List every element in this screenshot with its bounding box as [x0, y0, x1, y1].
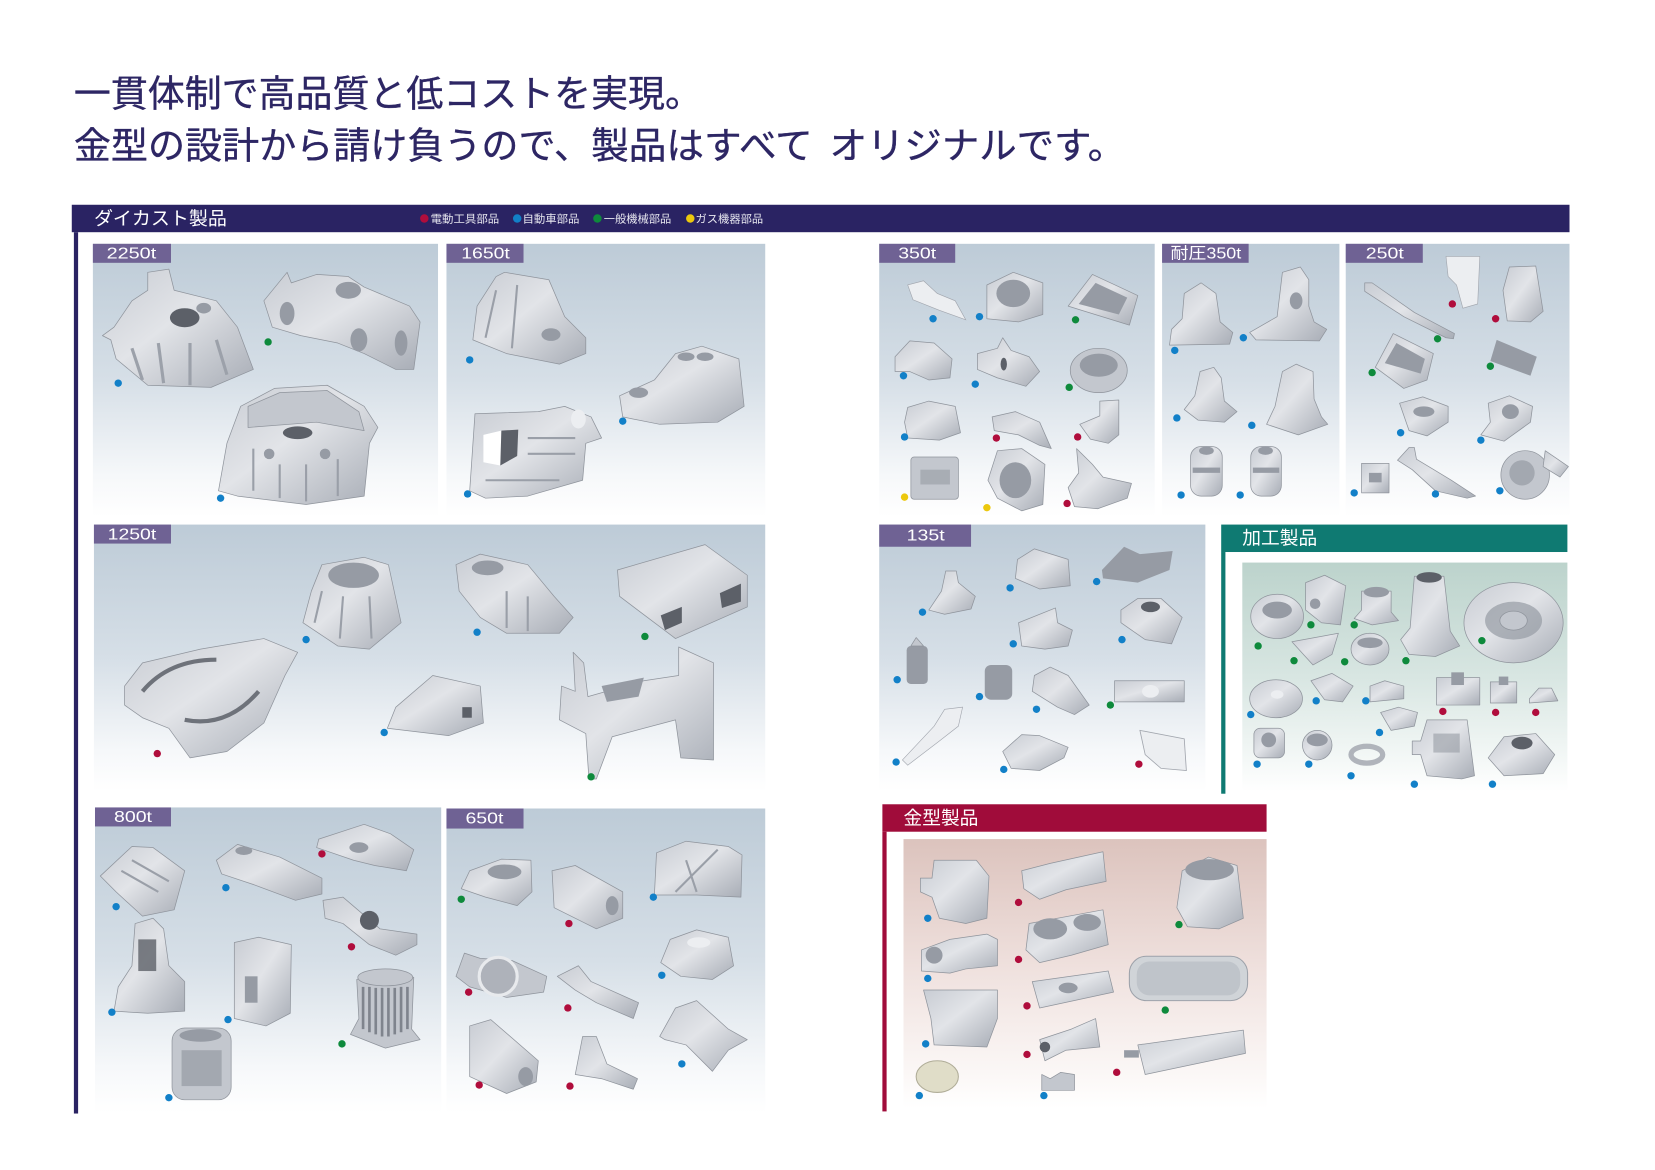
part: long block: [317, 824, 414, 871]
part: flanged housing: [1397, 397, 1448, 436]
part: handle shell: [1446, 256, 1480, 308]
part: square block: [1306, 575, 1346, 629]
part: heat sink: [1368, 334, 1433, 388]
part: tall cone: [1401, 572, 1460, 664]
part: impeller cover: [976, 272, 1043, 322]
title: オリジナルです。: [830, 125, 1125, 166]
part: small round base: [1253, 728, 1285, 768]
title: 一貫体制で高品質と低コストを実現。: [74, 74, 702, 115]
part: shallow dish: [1247, 680, 1302, 718]
part: small block: [1362, 681, 1404, 705]
tag: 2250t: [93, 244, 171, 263]
header: machined products: 加工製品: [1242, 528, 1317, 549]
part: rib box: [922, 990, 997, 1048]
panel: 250t: [1346, 244, 1570, 517]
part: flanged plate: [1376, 707, 1418, 736]
part: triangle plate: [1290, 633, 1338, 665]
part: pipe body: [921, 934, 997, 982]
section: die-cast products header and frame: ダイカスト製品: [94, 208, 227, 229]
part: cartridge: [893, 638, 928, 684]
part: flanged cylinder: [1350, 587, 1399, 629]
part: valve B: [1240, 267, 1327, 341]
panel: 350t: [879, 244, 1155, 517]
part: burner body: [983, 449, 1045, 511]
part: cover casting: [1000, 735, 1068, 773]
part: bracket arm: [1397, 448, 1476, 498]
header: machined products: [1221, 525, 1567, 794]
part: fitting A: [1177, 446, 1222, 499]
tag: 1650t: 1650t: [461, 246, 511, 263]
tag: 1650t: [446, 244, 524, 263]
panel: 2250t: [93, 244, 438, 517]
part: L-pipe: [1074, 400, 1119, 443]
panel: 1650t: [446, 244, 765, 517]
panel: machined products: [1221, 525, 1567, 794]
part: finned cylinder: [338, 969, 420, 1048]
part: motor body: [1411, 720, 1475, 788]
legend: ガス機器部品: [696, 213, 763, 226]
title: 製品はすべて: [591, 125, 813, 166]
part: grid plate: [1129, 956, 1248, 1014]
part: tall case: [224, 937, 291, 1026]
part: small base: [1490, 677, 1517, 716]
part: motor frame: [559, 647, 714, 781]
tag: pressure-tight 350t: 耐圧350t: [1171, 245, 1242, 263]
part: bell housing: [302, 557, 401, 649]
tag: 350t: [879, 244, 955, 263]
part: gasket ring: [1347, 746, 1383, 779]
tag: 250t: [1346, 244, 1423, 263]
tag: 350t: 350t: [898, 246, 937, 263]
part: valve A: [1169, 283, 1233, 354]
part: flanged housing: [1488, 734, 1555, 788]
part: angled arm: [892, 707, 963, 766]
part: gear case: [456, 554, 573, 636]
tag: 135t: [879, 525, 971, 547]
tag: 650t: [446, 808, 524, 829]
part: low boss: [1529, 688, 1558, 716]
part: twin cup block: [1015, 910, 1108, 963]
tag: 800t: [95, 807, 171, 826]
section: die-cast products header and frame: [72, 205, 1570, 1114]
part: valve D: [1248, 364, 1328, 435]
part: shroud: [458, 859, 532, 906]
panel: 650t: [446, 808, 765, 1114]
tag: 2250t: 2250t: [107, 246, 157, 263]
part: cover shell: [1492, 266, 1543, 322]
part: pale boss: [916, 1061, 958, 1099]
part: pocket plate: [1023, 971, 1114, 1010]
part: bell: [1477, 396, 1533, 444]
legend: 自動車部品: [522, 213, 579, 226]
header: die products: 金型製品: [903, 807, 978, 828]
part: arm with gear: [323, 897, 417, 955]
part: ring: [1341, 633, 1389, 665]
part: small housing: [1311, 673, 1353, 705]
part: ribbed cover: [650, 841, 742, 901]
part: large disc: [1464, 583, 1563, 663]
part: round housing: [1118, 598, 1182, 644]
title: [74, 74, 1125, 166]
part: plate: [1006, 549, 1070, 592]
part: spool: [976, 665, 1012, 700]
tag: 650t: 650t: [465, 810, 504, 827]
part: bell housing: [102, 269, 253, 387]
part: spoked wheel: [456, 953, 547, 997]
part: oval case: [216, 844, 322, 900]
part: small clip: [1040, 1072, 1074, 1099]
part: fan wheel: [1066, 348, 1127, 393]
legend: 電動工具部品: [431, 213, 499, 226]
part: open frame case: [464, 406, 602, 498]
part: cylinder sleeve: [1175, 857, 1243, 929]
title: 金型の設計から請け負うので、: [74, 125, 591, 166]
part: cylinder block: [901, 401, 960, 441]
part: small heat sink: [1487, 340, 1537, 376]
tag: 250t: 250t: [1366, 246, 1405, 263]
part: small block: [1350, 463, 1389, 497]
part: round cover plate: [125, 639, 298, 758]
part: double tube: [1010, 608, 1072, 649]
part: cup: [1302, 730, 1332, 768]
tag: pressure-tight 350t: [1162, 244, 1249, 263]
part: cylinder case: [165, 1028, 231, 1101]
panel: die products: [882, 804, 1267, 1111]
part: housing: [972, 338, 1040, 388]
part: valve C: [1173, 367, 1237, 422]
part: cone fitting: [1023, 1019, 1100, 1061]
tag: 800t: 800t: [114, 809, 153, 826]
tag: 1250t: [94, 525, 171, 544]
part: stem arm: [566, 1036, 638, 1090]
part: nozzle: [1015, 852, 1106, 906]
part: fitting B: [1236, 446, 1281, 499]
part: tower housing: [108, 918, 185, 1016]
panel: 135t: [879, 525, 1205, 792]
panel: 1250t: [94, 525, 765, 792]
part: lever: [557, 966, 639, 1019]
part: dome flange: [658, 930, 734, 979]
part: transmission case: [466, 272, 586, 364]
part: valve body: [895, 341, 952, 380]
part: gearbox block: [264, 272, 420, 369]
part: cone flange: [919, 571, 975, 616]
part: bracket: [908, 281, 966, 322]
tag: 1250t: 1250t: [108, 526, 157, 543]
part: housing: [217, 385, 378, 505]
panel: pressure-tight 350t: [1162, 244, 1339, 517]
part: engine block: [100, 846, 185, 916]
part: vented cover: [1496, 451, 1568, 499]
part: elbow: [992, 412, 1051, 449]
part: bracket: [1093, 547, 1173, 585]
legend: 一般機械部品: [604, 213, 671, 226]
part: finned wheel: [1251, 594, 1304, 650]
tag: 135t: 135t: [907, 527, 945, 544]
panel: 800t: [95, 807, 441, 1114]
part: twin-bore housing: [619, 346, 744, 425]
header: die products: [882, 804, 1267, 1111]
part: small case: [381, 676, 483, 736]
part: square tube: [552, 865, 623, 929]
part: base with post: [1437, 672, 1480, 715]
part: half shell: [660, 1001, 747, 1071]
part: flat plate: [1107, 681, 1184, 709]
part: thin frame: [1135, 730, 1186, 771]
part: angled block: [470, 1020, 538, 1093]
part: long arm: [1365, 283, 1454, 343]
legend: [420, 213, 763, 226]
part: pump housing: [1032, 667, 1089, 715]
part: cover plate: [901, 457, 958, 501]
part: electronics box: [617, 545, 747, 640]
part: motor casing: [920, 860, 989, 924]
part: long bar: [1113, 1030, 1245, 1076]
part: finned plate: [1068, 274, 1138, 325]
part: dome: [1063, 449, 1131, 509]
